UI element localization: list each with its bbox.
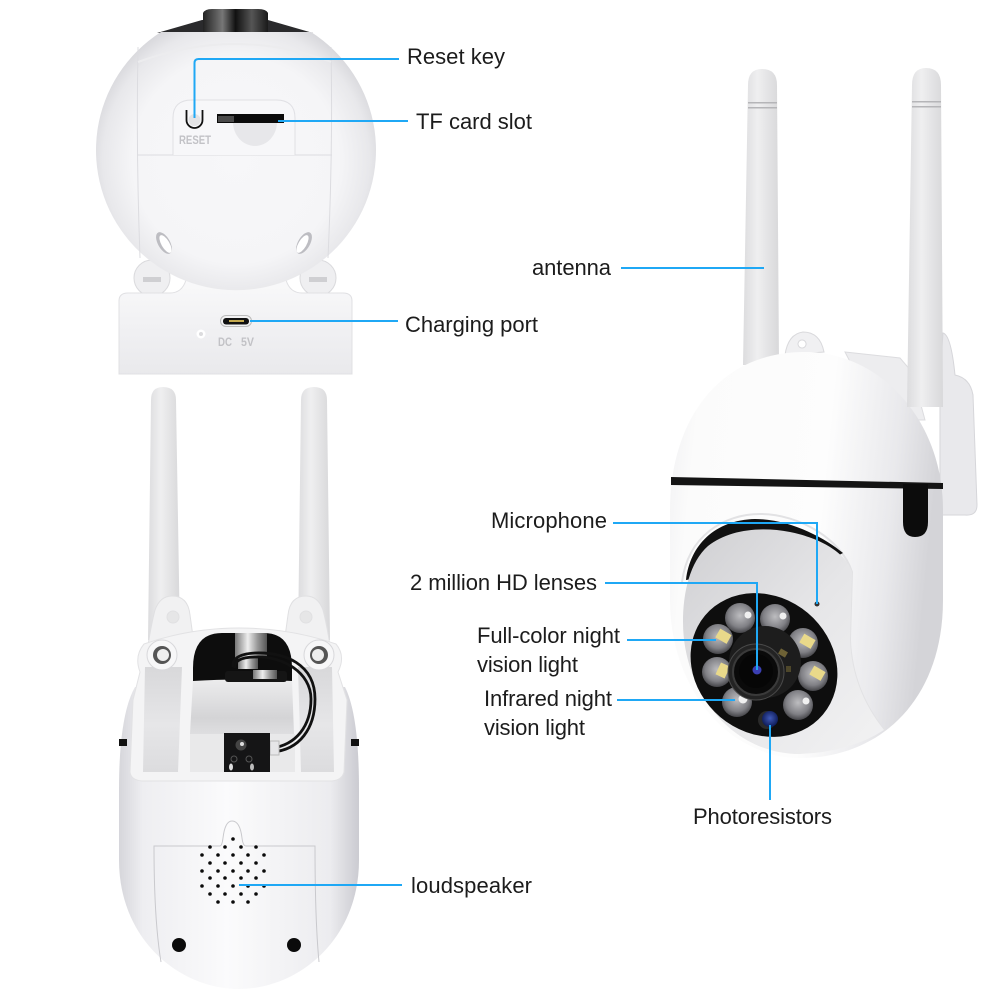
callout: HD lenses: 2 million HD lenses xyxy=(410,570,597,595)
inner ball housing xyxy=(190,680,294,734)
right rear antenna xyxy=(298,387,330,640)
mount screw holes xyxy=(153,230,315,256)
black lens face xyxy=(661,563,867,767)
cable connector xyxy=(270,741,279,755)
dome body xyxy=(670,352,943,758)
bracket shoulder behind dome xyxy=(845,352,925,420)
back panel screws xyxy=(172,938,301,952)
charging base feet xyxy=(134,260,336,296)
product view: camera rear with speaker xyxy=(119,387,359,989)
DC 5V label: 5V xyxy=(241,335,254,349)
reset label: RESET xyxy=(179,133,212,147)
DC 5V label: DC xyxy=(218,335,232,349)
callout: microphone xyxy=(491,508,817,604)
left antenna xyxy=(743,69,779,365)
board step xyxy=(190,734,295,772)
callout: reset key xyxy=(194,44,505,118)
callout: photoresistors: Photoresistors xyxy=(693,804,832,829)
main lens xyxy=(728,626,801,700)
callout: infrared night vision light: vision light xyxy=(484,715,585,740)
black board module xyxy=(224,733,270,772)
product view: top camera back with reset key and TF slot xyxy=(96,9,376,374)
callout: loudspeaker: loudspeaker xyxy=(411,873,532,898)
callout: full-color night vision light: vision light xyxy=(477,652,578,677)
left rear antenna xyxy=(148,387,180,640)
TF card slot xyxy=(217,114,284,123)
micro USB port xyxy=(220,316,252,326)
black stripe xyxy=(671,477,943,489)
callout: full-color night vision light xyxy=(477,623,716,677)
black side slot xyxy=(903,484,928,537)
callout: microphone: Microphone xyxy=(491,508,607,533)
white infrared chips xyxy=(738,612,810,704)
back panel seam and notch xyxy=(154,821,319,962)
mount screw rings xyxy=(147,640,334,670)
antenna brackets xyxy=(147,596,331,652)
callout: reset key: Reset key xyxy=(407,44,505,69)
photoresistor xyxy=(758,711,778,729)
full-color yellow chips xyxy=(715,629,826,681)
callout: antenna: antenna xyxy=(532,255,612,280)
hanging loop xyxy=(785,332,824,355)
antenna cable xyxy=(233,653,315,752)
camera ball xyxy=(683,529,884,754)
black window xyxy=(193,633,292,681)
rear body xyxy=(119,687,359,989)
status LED xyxy=(196,330,206,338)
mount recesses xyxy=(143,667,334,772)
reset button xyxy=(186,110,202,128)
slot cover tab xyxy=(173,100,295,155)
round camera body xyxy=(96,32,376,290)
speaker grille xyxy=(200,837,266,904)
callout: TF card slot: TF card slot xyxy=(416,109,532,134)
DC 5V label xyxy=(218,335,254,349)
shell inner edge xyxy=(682,514,884,730)
callout: HD lenses xyxy=(410,570,757,670)
product view: camera front xyxy=(661,68,977,767)
callout: infrared night vision light: Infrared night xyxy=(484,686,612,711)
side black stripes xyxy=(119,739,359,746)
cover latch circle xyxy=(233,122,277,146)
infrared LEDs xyxy=(702,603,828,720)
right antenna xyxy=(907,68,943,407)
charging base xyxy=(119,280,352,374)
callout: full-color night vision light: Full-color night xyxy=(477,623,620,648)
callout: photoresistors xyxy=(693,725,832,829)
microphone hole xyxy=(814,602,820,606)
callout: charging port: Charging port xyxy=(405,312,538,337)
black crescent shadow xyxy=(686,519,843,580)
wall bracket xyxy=(940,333,977,515)
top lens stub xyxy=(157,9,313,33)
callout: infrared night vision light xyxy=(484,686,735,740)
silver pivot xyxy=(225,633,287,682)
body seams xyxy=(137,44,332,258)
rear mount plate xyxy=(130,628,347,781)
